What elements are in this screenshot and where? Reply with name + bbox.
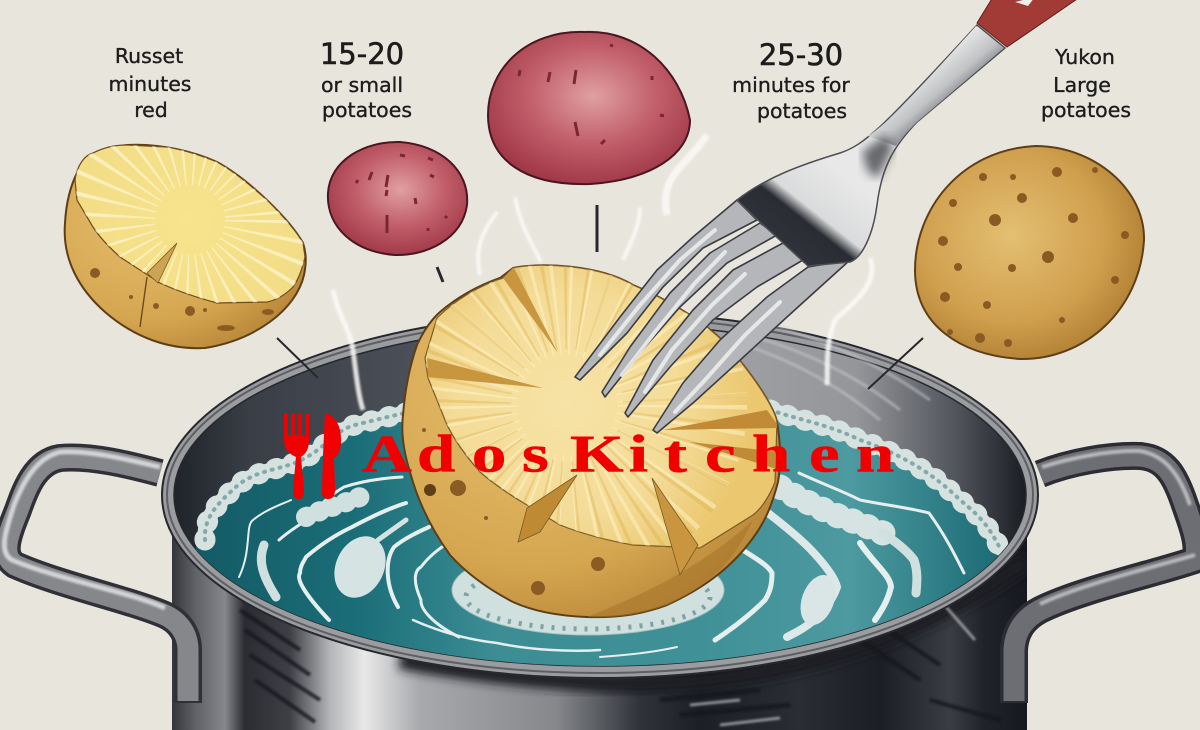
- foam patches: [306, 497, 360, 517]
- potato: center cut potato: [402, 265, 780, 617]
- neck shadow: [862, 135, 893, 178]
- pot rim: [162, 312, 1038, 678]
- label: Yukon: [1041, 45, 1131, 122]
- interior wall highlights: [730, 325, 930, 420]
- pot body shadow and streaks: [238, 580, 1000, 728]
- fork handle: [977, 0, 1080, 47]
- foam under potato: [452, 570, 724, 636]
- label: 25-30: minutes for: [732, 73, 850, 97]
- label: Russet: Russet: [115, 44, 183, 68]
- pot: [162, 312, 1038, 730]
- label: Yukon: Yukon: [1054, 45, 1115, 69]
- wordmark: AdosKitchen: [362, 425, 894, 484]
- spots: [90, 268, 274, 331]
- lower skin shading: [587, 520, 753, 617]
- label: Russet: minutes: [109, 72, 191, 96]
- potato flesh: [425, 265, 777, 548]
- label: 25-30: 25-30: [759, 38, 843, 72]
- icon: left pot handle: [4, 452, 188, 703]
- label: 25-30: [732, 38, 850, 123]
- neck steel: [868, 26, 1004, 146]
- label: 25-30: potatoes: [757, 99, 847, 123]
- potato: yukon gold: [915, 146, 1144, 359]
- foam edge right: [770, 410, 1000, 548]
- steam: [333, 135, 872, 410]
- foam edge left: [205, 412, 410, 540]
- pot body: [172, 495, 1027, 730]
- potato: small red: [328, 142, 467, 255]
- icon: fork and knife: [284, 413, 341, 499]
- cut: [147, 243, 177, 283]
- flesh: [75, 145, 305, 303]
- icon: right pot handle: [1014, 451, 1197, 703]
- label: Russet: [109, 44, 191, 122]
- potato: large red: [488, 32, 690, 184]
- fork neck and head: [737, 25, 1005, 266]
- potato: halved russet: [65, 135, 306, 348]
- potato eyes: [422, 428, 605, 595]
- swirls: [239, 473, 964, 657]
- watermark logo: [284, 413, 894, 499]
- pot interior: [174, 324, 1026, 666]
- label: 15-20: potatoes: [322, 98, 412, 122]
- boiling water: [196, 403, 1006, 680]
- flesh rays and cuts: [427, 266, 780, 523]
- label: Yukon: Large: [1053, 73, 1111, 97]
- flesh rays: [105, 135, 275, 305]
- label: 15-20: or small: [321, 73, 403, 97]
- callout lines: [277, 205, 923, 389]
- label: 15-20: 15-20: [320, 37, 404, 71]
- label: Yukon: potatoes: [1041, 98, 1131, 122]
- label: 15-20: [320, 37, 412, 122]
- tine highlights: [600, 230, 780, 412]
- label: Russet: red: [134, 98, 168, 122]
- fork tines: [575, 200, 850, 433]
- potato cuts: [518, 475, 577, 542]
- fork: [575, 0, 1080, 433]
